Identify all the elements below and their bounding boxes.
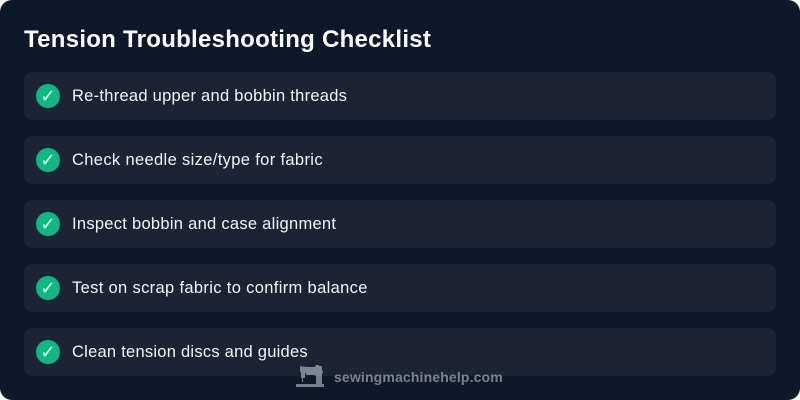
watermark text: sewingmachinehelp.com (334, 369, 503, 385)
icon: check badge (36, 276, 60, 300)
item text: Check needle size/type for fabric (72, 151, 323, 169)
item text: Re-thread upper and bobbin threads (72, 87, 347, 105)
checklist item 1 (24, 72, 776, 120)
item text: Inspect bobbin and case alignment (72, 215, 336, 233)
icon: check badge (36, 340, 60, 364)
icon: check badge: ✓ (40, 214, 56, 235)
icon: check badge: ✓ (40, 342, 56, 363)
icon: check badge: ✓ (40, 278, 56, 299)
icon: check badge: ✓ (40, 86, 56, 107)
title: Tension Troubleshooting Checklist (24, 26, 431, 53)
item text: Clean tension discs and guides (72, 343, 308, 361)
checklist item 5 (24, 328, 776, 376)
icon: sewing machine (296, 365, 324, 387)
checklist item 3 (24, 200, 776, 248)
icon: check badge (36, 148, 60, 172)
checklist item 2 (24, 136, 776, 184)
icon: check badge (36, 212, 60, 236)
icon: check badge: ✓ (40, 150, 56, 171)
checklist item 4 (24, 264, 776, 312)
icon: check badge (36, 84, 60, 108)
watermark (296, 365, 503, 387)
item text: Test on scrap fabric to confirm balance (72, 279, 368, 297)
